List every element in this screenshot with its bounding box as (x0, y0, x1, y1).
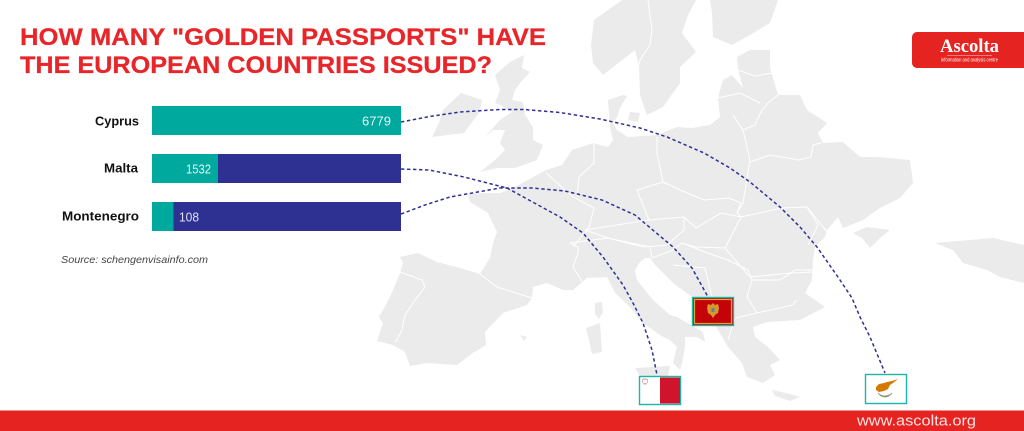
title (20, 24, 546, 79)
flag: Montenegro (692, 298, 734, 326)
background map of Europe (377, 0, 1024, 401)
bar: Cyprus (95, 106, 401, 135)
arrow: Malta to flag (401, 169, 657, 375)
flag: Cyprus (866, 374, 906, 404)
bar: Malta (104, 154, 401, 183)
bar chart (62, 106, 401, 231)
bar: Montenegro: 108 (179, 210, 199, 224)
bar: Cyprus: Cyprus (95, 114, 139, 128)
arrow: Montenegro to flag (401, 188, 708, 297)
bar: Montenegro (62, 202, 401, 231)
bar: Malta: Malta (104, 160, 139, 176)
website url: www.ascolta.org (856, 412, 976, 430)
flag: Malta (640, 376, 680, 404)
source note: Source: schengenvisainfo.com (61, 254, 208, 266)
bar: Cyprus: 6779 (362, 114, 391, 128)
logo: Ascolta (912, 32, 1024, 68)
bar: Malta: 1532 (186, 162, 211, 176)
logo: Ascolta: information and analysis centre (941, 58, 998, 64)
title: HOW MANY "GOLDEN PASSPORTS" HAVE (20, 24, 546, 51)
footer bar (0, 410, 1024, 431)
title: THE EUROPEAN COUNTRIES ISSUED? (20, 52, 492, 79)
logo: Ascolta: Ascolta (940, 36, 999, 57)
arrow: Cyprus to flag (401, 110, 885, 373)
bar: Montenegro: Montenegro (62, 208, 139, 224)
